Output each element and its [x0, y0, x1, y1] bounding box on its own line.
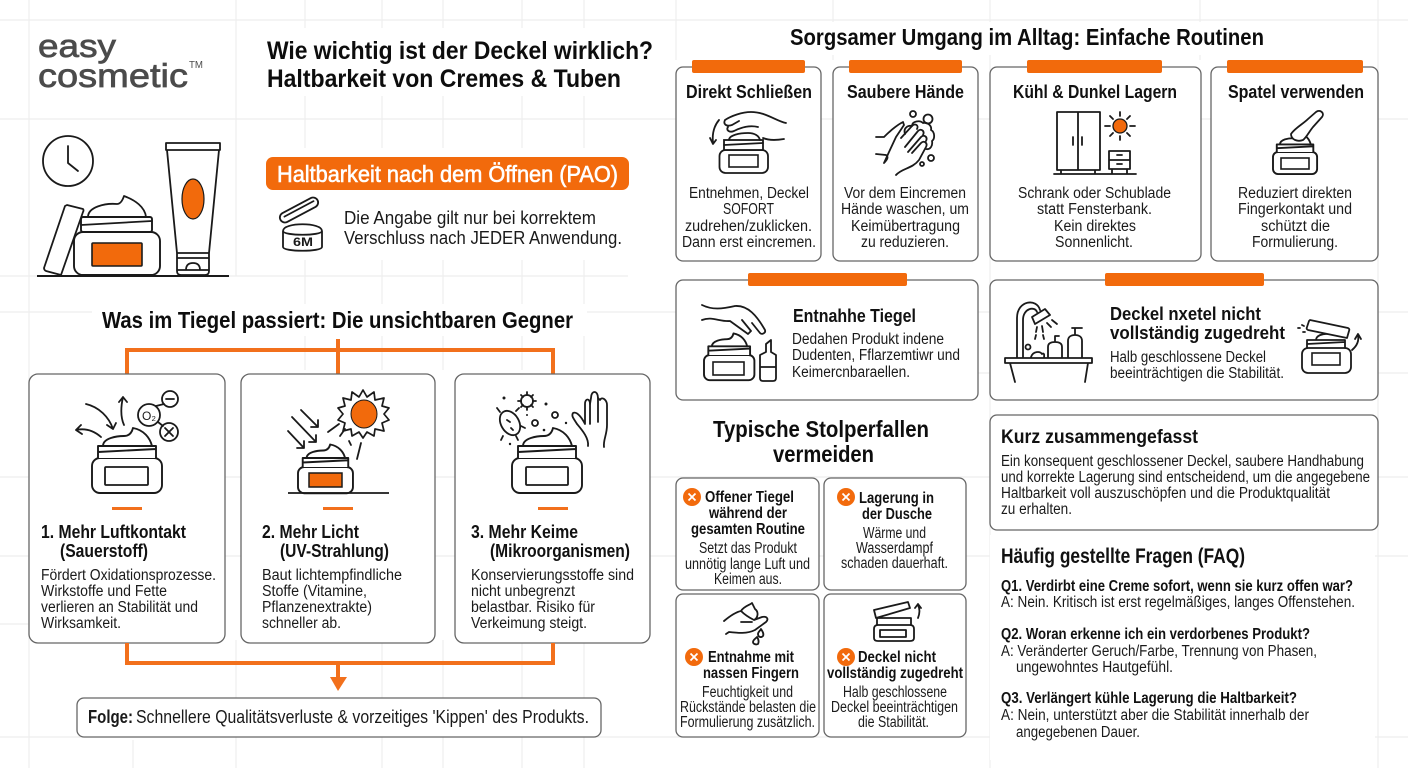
panel: Direkt Schließen — [676, 60, 821, 261]
icon: clock — [43, 136, 93, 186]
text — [1018, 185, 1171, 251]
heading: Direkt Schließen — [686, 82, 812, 102]
logo: easy cosmetic: easy — [38, 28, 116, 64]
FAQ 1: A: Nein. Kritisch ist erst regelmäßiges, langes Offenstehen. — [1001, 594, 1355, 611]
text: Halb geschlossene Deckel — [1110, 349, 1266, 366]
icon: jar with tilted lid — [1298, 320, 1361, 373]
heading: Spatel verwenden — [1228, 82, 1364, 102]
callout: Folge: Folge: — [88, 707, 133, 727]
icon: jar in sunlight — [288, 390, 389, 493]
text: Feuchtigkeit und — [702, 684, 793, 701]
icon: x mark — [683, 488, 701, 506]
text: Halb geschlossene — [843, 684, 947, 701]
icon: 6M open jar — [278, 196, 322, 251]
text: Setzt das Produkt — [699, 540, 798, 557]
panel: Mehr Luftkontakt — [29, 374, 225, 643]
text: Sonnenlicht. — [1055, 234, 1133, 251]
arrow: bottom bracket to result — [127, 643, 553, 691]
icon: spatula and jar — [1273, 111, 1323, 174]
heading: Saubere Hände — [847, 82, 964, 102]
text: die Stabilität. — [858, 714, 929, 731]
PAO badge: Haltbarkeit nach dem Öffnen (PAO) — [277, 161, 618, 187]
text — [1110, 349, 1284, 382]
text: description: schneller ab. — [262, 615, 341, 632]
text: description: Fördert Oxidationsprozesse. — [41, 567, 216, 584]
text — [831, 684, 958, 731]
text: description — [41, 567, 216, 632]
icon: 6M open jar: 6M — [293, 235, 313, 249]
heading: vollständig zugedreht — [1110, 323, 1285, 343]
FAQ 1: Q1. Verdirbt eine Creme sofort, wenn sie kurz offen war? — [1001, 578, 1353, 595]
panel: Offener Tiegel — [676, 478, 819, 590]
text: Entnehmen, Deckel — [689, 185, 809, 202]
heading: Typische Stolperfallen — [713, 416, 929, 467]
text — [841, 525, 948, 572]
panel: Spatel verwenden — [1211, 60, 1378, 261]
panel: Mehr Keime — [455, 374, 650, 643]
PAO note: Die Angabe gilt nur bei korrektem — [344, 208, 596, 228]
icon: jar with air and oxygen — [76, 391, 178, 493]
panel: FAQ — [1001, 545, 1355, 741]
icon: leaning lid — [44, 205, 84, 275]
icon: jar with germs and hand — [496, 392, 607, 493]
heading: 3. Mehr Keime: 3. Mehr Keime — [471, 522, 578, 542]
text: description: Konservierungsstoffe sind — [471, 567, 634, 584]
text: SOFORT — [723, 201, 774, 218]
icon: jar with air and oxygen: O₂ — [142, 409, 156, 423]
text — [685, 540, 810, 588]
text — [1238, 185, 1352, 251]
FAQ 2: Q2. Woran erkenne ich ein verdorbenes Produkt? — [1001, 626, 1310, 643]
text — [682, 185, 816, 251]
logo: easy cosmetic: TM — [189, 60, 203, 71]
heading — [691, 489, 805, 538]
text: Schrank oder Schublade — [1018, 185, 1171, 202]
FAQ 3: A: Nein, unterstützt aber die Stabilität innerhalb der — [1001, 707, 1309, 724]
title — [267, 37, 653, 93]
heading: 1. Mehr Luftkontakt — [41, 522, 186, 561]
text: beeinträchtigen die Stabilität. — [1110, 365, 1284, 382]
text: Wärme und — [863, 525, 926, 542]
heading: während der — [708, 505, 787, 522]
text: description — [471, 567, 634, 632]
text: Hände waschen, um — [841, 201, 969, 218]
panel: Lagerung in der Dusche — [824, 478, 966, 590]
heading: 3. Mehr Keime: (Mikroorganismen) — [490, 541, 630, 561]
text — [792, 331, 960, 381]
text: schaden dauerhaft. — [841, 555, 948, 572]
heading: gesamten Routine — [691, 521, 805, 538]
text: Dann erst eincremen. — [682, 234, 816, 251]
text: zu erhalten. — [1001, 501, 1072, 518]
heading: Entnahme mit — [708, 649, 794, 666]
text: Keimen aus. — [714, 571, 782, 588]
panel: Saubere Hände — [833, 60, 978, 261]
icon: x mark — [837, 488, 855, 506]
panel: Deckel nicht zugedreht — [990, 273, 1378, 400]
panel: Entnahme Tiegel — [676, 273, 978, 400]
icon: wardrobe, nightstand and sun — [1054, 112, 1136, 174]
FAQ 3: Q3. Verlängert kühle Lagerung die Haltbarkeit? — [1001, 690, 1297, 707]
icon: hand closing jar — [710, 112, 786, 173]
icon: x mark — [685, 648, 703, 666]
heading: Offener Tiegel — [705, 489, 794, 506]
heading: 2. Mehr Licht — [262, 522, 389, 561]
heading — [1110, 304, 1285, 343]
icon: jar with open lid — [874, 602, 921, 641]
text: description: Verkeimung steigt. — [471, 615, 587, 632]
heading: Deckel nxetel nicht — [1110, 304, 1261, 324]
text: Reduziert direkten — [1238, 185, 1352, 202]
logo: easy cosmetic: cosmetic — [38, 57, 188, 94]
FAQ 3 — [1001, 690, 1309, 741]
panel: Kurz zusammengefasst — [990, 415, 1378, 530]
icon: hand over jar and bottle — [702, 305, 776, 381]
text: zudrehen/zuklicken. — [685, 218, 812, 235]
text: unnötig lange Luft und — [685, 556, 810, 573]
heading: 2. Mehr Licht: 2. Mehr Licht — [262, 522, 359, 542]
FAQ 1 — [1001, 578, 1355, 611]
heading: Typische Stolperfallen: vermeiden — [773, 441, 874, 467]
heading: Kühl & Dunkel Lagern — [1013, 82, 1177, 102]
panel: Deckel nicht vollständig zugedreht — [824, 594, 966, 737]
text: zu reduzieren. — [861, 234, 949, 251]
icon: shower and bath products — [1005, 302, 1092, 382]
heading: vollständig zugedreht — [827, 665, 963, 682]
text: description: nicht unbegrenzt — [471, 583, 576, 600]
heading: 3. Mehr Keime — [471, 522, 630, 561]
text: Rückstände belasten die — [680, 699, 816, 716]
title: Haltbarkeit von Cremes & Tuben — [267, 65, 621, 93]
text: Haltbarkeit voll auszuschöpfen und die Produktqualität — [1001, 485, 1331, 502]
panel: Mehr Licht — [241, 374, 435, 643]
text: description: Wirksamkeit. — [41, 615, 121, 632]
text: Keimübertragung — [851, 218, 960, 235]
text: description: Stoffe (Vitamine, — [262, 583, 367, 600]
icon: washing hands — [876, 111, 934, 175]
text: description: Baut lichtempfindliche — [262, 567, 402, 584]
heading — [859, 490, 934, 523]
text — [1001, 453, 1370, 518]
illustration: clock, cream jar and tube — [37, 136, 229, 276]
text: Wasserdampf — [856, 540, 934, 557]
text: Formulierung. — [1252, 234, 1338, 251]
text — [841, 185, 969, 251]
callout: Folge — [77, 698, 601, 737]
FAQ 2: A: Veränderter Geruch/Farbe, Trennung von Phasen, — [1001, 643, 1317, 660]
icon: wet hand — [724, 603, 767, 644]
text: description: belastbar. Risiko für — [471, 599, 595, 616]
text: description: Wirkstoffe und Fette — [41, 583, 167, 600]
heading: 1. Mehr Luftkontakt: (Sauerstoff) — [60, 541, 148, 561]
icon: cream jar — [74, 196, 160, 275]
heading: Kurz zusammengefasst — [1001, 427, 1199, 448]
text: description: Pflanzenextrakte) — [262, 599, 372, 616]
text: Fingerkontakt und — [1238, 201, 1352, 218]
text: schützt die — [1261, 218, 1330, 235]
icon: tube — [166, 143, 220, 275]
connector: top bracket — [127, 339, 553, 374]
text: description: verlieren an Stabilität und — [41, 599, 198, 616]
PAO note: Verschluss nach JEDER Anwendung. — [344, 228, 622, 248]
text: Dudenten, Fflarzemtiwr und — [792, 347, 960, 364]
heading: 2. Mehr Licht: (UV-Strahlung) — [280, 541, 389, 561]
logo: easy cosmetic — [38, 28, 203, 94]
heading: Deckel nicht — [858, 649, 936, 666]
text: Vor dem Eincremen — [844, 185, 966, 202]
heading: Lagerung in — [859, 490, 934, 507]
heading: nassen Fingern — [703, 665, 799, 682]
panel: Kühl & Dunkel Lagern — [990, 60, 1201, 261]
heading: Typische Stolperfallen: Typische Stolperfallen — [713, 416, 929, 442]
heading: Was im Tiegel passiert: Was im Tiegel passiert: Die unsichtbaren Gegner — [102, 307, 573, 333]
heading: 1. Mehr Luftkontakt: 1. Mehr Luftkontakt — [41, 522, 186, 542]
FAQ 2 — [1001, 626, 1317, 676]
text: Dedahen Produkt indene — [792, 331, 944, 348]
text — [680, 684, 816, 731]
panel: Entnahme mit nassen Fingern — [676, 594, 819, 737]
title: Wie wichtig ist der Deckel wirklich? — [267, 37, 653, 65]
FAQ 3: angegebenen Dauer. — [1016, 724, 1140, 741]
text: Kein direktes — [1054, 218, 1136, 235]
text: statt Fensterbank. — [1037, 201, 1152, 218]
icon: x mark — [837, 648, 855, 666]
heading: Entnahhe Tiegel — [793, 306, 916, 326]
text: Formulierung zusätzlich. — [680, 714, 815, 731]
FAQ 2: ungewohntes Hautgefühl. — [1016, 659, 1173, 676]
callout: Folge: Schnellere Qualitätsverluste & vorzeitiges 'Kippen' des Produkts. — [136, 707, 589, 727]
heading — [827, 649, 963, 682]
text: description — [262, 567, 402, 632]
heading: Sorgsamer Umgang: Sorgsamer Umgang im Alltag: Einfache Routinen — [790, 24, 1264, 50]
PAO note — [344, 208, 622, 248]
text: Deckel beeinträchtigen — [831, 699, 958, 716]
text: Keimercnbaraellen. — [792, 364, 910, 381]
heading: Häufig gestellte Fragen (FAQ) — [1001, 545, 1245, 568]
heading — [703, 649, 799, 682]
heading: der Dusche — [862, 506, 932, 523]
